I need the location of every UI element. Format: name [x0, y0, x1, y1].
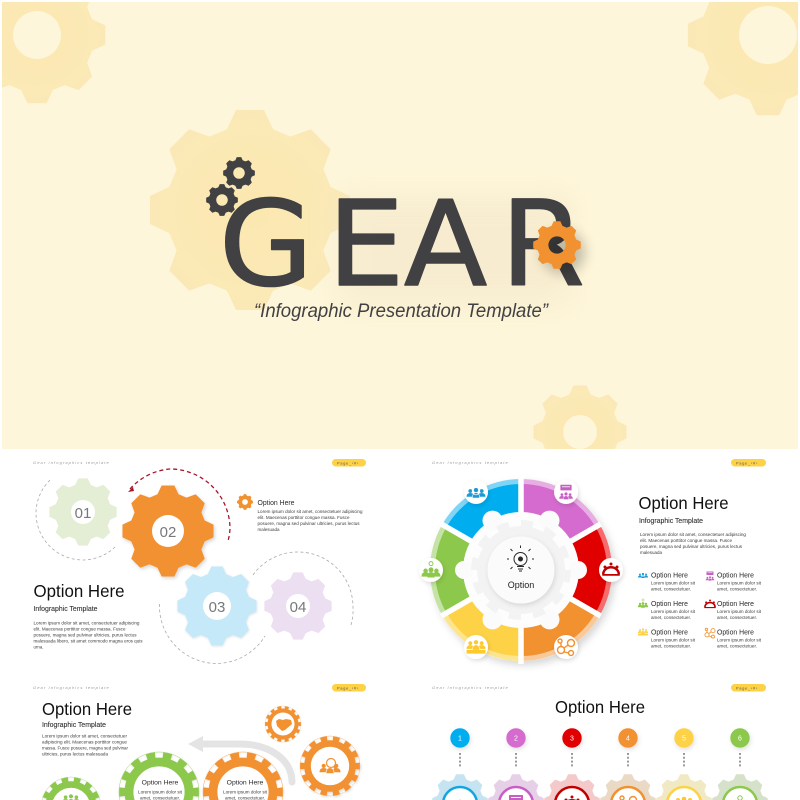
gear 01: [49, 478, 117, 546]
text block: option: adipiscing elit. Maecenas porttitor congue: [42, 740, 127, 744]
center gear: [455, 511, 587, 629]
panel: circular six-option slide: [419, 459, 766, 664]
legend: six options: [638, 572, 762, 648]
page pill: Page_‹#›: [736, 461, 758, 465]
gear: mid orange: Lorem ipsum dolor sit: [223, 790, 268, 794]
text block: option top: posuere, magna sed pulvinar ultricies, purus lectus: [258, 521, 360, 526]
gear 03: [177, 566, 257, 646]
label: Option: Option: [508, 580, 534, 590]
arc: red arrow around 02: [128, 469, 230, 541]
legend: six options: Option Here: [651, 572, 688, 580]
header: Gear Infographics template: [33, 460, 110, 465]
text block: option heading: [638, 493, 746, 555]
icon: light bulb: [507, 546, 534, 571]
legend: six options: amet, consectetuer.: [651, 644, 691, 648]
text block: option main: Option Here: [34, 581, 124, 601]
legend: six options: Option Here: [717, 630, 754, 636]
gear: mid green: Lorem ipsum dolor sit: [138, 790, 183, 794]
step 6: [712, 728, 768, 800]
text block: option main: Infographic Template: [34, 604, 98, 613]
text block: option main: [34, 581, 143, 650]
step 3: [544, 728, 600, 800]
text block: option heading: Infographic Template: [639, 516, 703, 525]
legend: six options: Lorem ipsum dolor sit: [651, 609, 696, 614]
text block: option: ultricies, purus lectus malesuada: [42, 752, 108, 756]
arc: dashed around 04: [253, 552, 353, 625]
text block: option main: malesuada libero, sit amet commodo magna eros quis: [34, 638, 143, 644]
legend: six options: Option Here: [651, 630, 688, 636]
text block: option main: Lorem ipsum dolor sit amet, consectetuer adipiscing: [34, 620, 140, 626]
gear 04: 04: [290, 599, 306, 616]
gear 02: [122, 485, 214, 577]
text block: option main: urna.: [34, 644, 44, 650]
header: Gear Infographics template: [432, 685, 509, 690]
text block: option: Infographic Template: [42, 720, 106, 729]
gear: mid green: Option Here: [142, 780, 179, 786]
page pill: Page_‹#›: [736, 686, 758, 690]
step 5: 5: [682, 736, 686, 742]
text block: option top: [258, 500, 363, 532]
legend: six options: Lorem ipsum dolor sit: [651, 638, 696, 642]
step 1: [432, 728, 488, 800]
legend: six options: Option Here: [717, 572, 754, 580]
legend: six options: amet, consectetuer.: [717, 586, 757, 592]
gear: large orange people search: [300, 736, 360, 796]
legend: six options: amet, consectetuer.: [717, 615, 757, 620]
header: Gear Infographics template: [432, 460, 509, 465]
legend: six options: amet, consectetuer.: [651, 586, 691, 592]
gear 03: 03: [209, 599, 225, 616]
legend: six options: Lorem ipsum dolor sit: [717, 609, 762, 614]
panel: cover slide: [0, 0, 800, 479]
text block: option: massa. Fusce posuere, magna sed pulvinar: [42, 746, 128, 750]
decorative gear: bottom: [534, 386, 626, 449]
icon badges: [419, 480, 623, 659]
panel: four numbered gears slide: [33, 459, 366, 664]
title: Option Here: [555, 697, 645, 717]
gear 02: 02: [160, 524, 176, 541]
step 3: 3: [570, 736, 574, 742]
gear 01: 01: [75, 505, 91, 522]
page pill: Page_‹#›: [337, 461, 359, 465]
arrow: grey curved: [188, 736, 292, 782]
gear: mid green: [119, 752, 199, 800]
legend: six options: amet, consectetuer.: [717, 644, 757, 648]
text block: option main: elit. Maecenas porttitor congue massa. Fusce: [34, 626, 126, 632]
gear: mid orange: Option Here: [227, 780, 264, 786]
decorative gear: behind title: [150, 110, 350, 310]
decorative gear: top left: [0, 0, 105, 103]
legend: six options: amet, consectetuer.: [651, 615, 691, 620]
step 6: 6: [738, 736, 742, 742]
icon: orange gear on R: [533, 221, 581, 269]
text block: option heading: Option Here: [638, 493, 728, 513]
legend: six options: Option Here: [651, 601, 688, 608]
step 2: 2: [514, 736, 518, 742]
icon: two dark gears: [206, 157, 255, 216]
text block: option: [42, 699, 132, 756]
text block: option top: malesuada: [258, 527, 280, 532]
text block: option heading: elit. Maecenas porttitor congue massa. Fusce: [640, 538, 732, 543]
page pill: [731, 459, 766, 466]
text block: option: Option Here: [42, 699, 132, 719]
panel: six step gears slide: [432, 684, 768, 800]
panel: gear chain slide: [33, 684, 366, 800]
text block: option top: Option Here: [258, 500, 295, 507]
step 1: 1: [458, 736, 462, 742]
page pill: [731, 684, 766, 692]
step 4: [600, 728, 656, 800]
gear 04: [264, 572, 332, 640]
gear: mid orange: [203, 752, 283, 800]
text block: option heading: malesuada: [640, 550, 662, 555]
step 4: 4: [626, 736, 630, 742]
arc: dashed around 03: [159, 604, 265, 664]
subtitle: “Infographic Presentation Template”: [254, 301, 550, 322]
gear: small green: [41, 777, 101, 800]
text block: option heading: Lorem ipsum dolor sit amet, consectetuer adipiscing: [640, 532, 746, 537]
page pill: [332, 459, 366, 466]
title shadow: [352, 204, 560, 296]
donut shadow: [430, 479, 612, 661]
donut chart: [430, 476, 612, 664]
legend: six options: Lorem ipsum dolor sit: [717, 638, 762, 642]
legend: six options: Option Here: [717, 601, 754, 608]
text block: option heading: posuere, magna sed pulvinar ultricies, purus lectus: [640, 544, 743, 549]
legend: six options: Lorem ipsum dolor sit: [651, 580, 696, 586]
gear shadow: [541, 230, 585, 274]
page pill: Page_‹#›: [337, 686, 359, 690]
title: GEAR: GEAR: [219, 177, 585, 314]
step 2: [488, 728, 544, 800]
legend: six options: Lorem ipsum dolor sit: [717, 580, 762, 586]
header: Gear Infographics template: [33, 685, 110, 690]
gear: small orange handshake: [265, 706, 301, 742]
text block: option top: Lorem ipsum dolor sit amet, consectetuer adipiscing: [258, 509, 363, 514]
text block: option top: elit. Maecenas porttitor congue massa. Fusce: [258, 515, 350, 520]
page pill: [332, 684, 366, 692]
icon: small orange gear: [237, 494, 253, 510]
arc: dashed around 01: [36, 480, 115, 560]
connectors: [460, 753, 740, 767]
decorative gear: top right: [688, 0, 800, 115]
text block: option main: posuere, magna sed pulvinar ultricies, purus lectus: [34, 632, 137, 638]
text block: option: Lorem ipsum dolor sit amet, consectetuer: [42, 734, 127, 738]
step 5: [656, 728, 712, 800]
